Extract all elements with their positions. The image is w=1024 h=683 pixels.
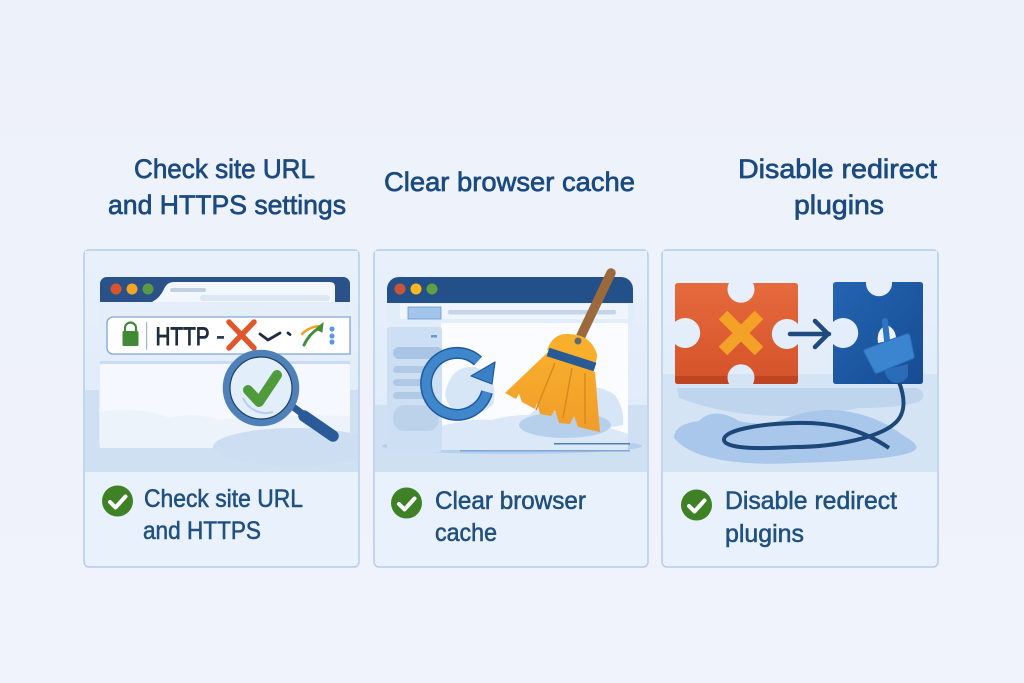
caption: check site URL: and HTTPS	[143, 517, 261, 545]
heading: disable redirect plugins	[738, 154, 938, 220]
icon: orange X	[723, 315, 759, 351]
heading: check site URL	[108, 154, 346, 220]
icon: broom	[505, 273, 611, 438]
icon: red X	[229, 322, 254, 348]
icon: plug and cable	[724, 318, 914, 448]
browser window	[387, 277, 633, 452]
icon: dark check	[260, 333, 290, 340]
caption: clear browser cache: Clear browser	[435, 487, 586, 515]
icon: green check badge	[681, 490, 712, 520]
icon: red puzzle piece	[675, 283, 798, 384]
caption: disable redirect plugins: plugins	[725, 520, 804, 548]
caption: disable redirect plugins: Disable redirect	[725, 487, 897, 515]
caption: check site URL	[102, 485, 303, 545]
illustration background	[375, 251, 647, 472]
icon: lock	[122, 322, 138, 346]
caption: clear browser cache: cache	[435, 519, 497, 547]
heading: clear browser cache: Clear browser cache	[384, 167, 635, 197]
URL bar	[107, 317, 350, 354]
icon: magnifying glass	[226, 354, 333, 436]
browser window	[100, 277, 350, 448]
heading: disable redirect plugins: Disable redirect	[738, 154, 938, 184]
caption: disable redirect plugins	[681, 487, 897, 548]
icon: green arrow	[302, 323, 323, 345]
icon: blue puzzle piece	[833, 282, 923, 384]
panel: check site URL	[84, 250, 377, 567]
icon: green check badge	[102, 486, 133, 516]
URL text: HTTP	[156, 323, 210, 351]
heading: disable redirect plugins: plugins	[794, 190, 884, 220]
heading: check site URL: and HTTPS settings	[108, 190, 346, 220]
illustration background	[85, 251, 358, 472]
icon: refresh arrow	[426, 353, 495, 415]
icon: green check badge	[391, 488, 422, 518]
icon: menu dots	[329, 326, 335, 345]
caption: clear browser cache	[391, 487, 586, 547]
panel: clear browser cache	[374, 250, 648, 567]
arrow	[790, 321, 829, 347]
panel: disable redirect plugins	[662, 250, 938, 567]
heading: check site URL: Check site URL	[134, 154, 315, 184]
caption: check site URL: Check site URL	[144, 485, 303, 513]
illustration background	[663, 251, 937, 472]
